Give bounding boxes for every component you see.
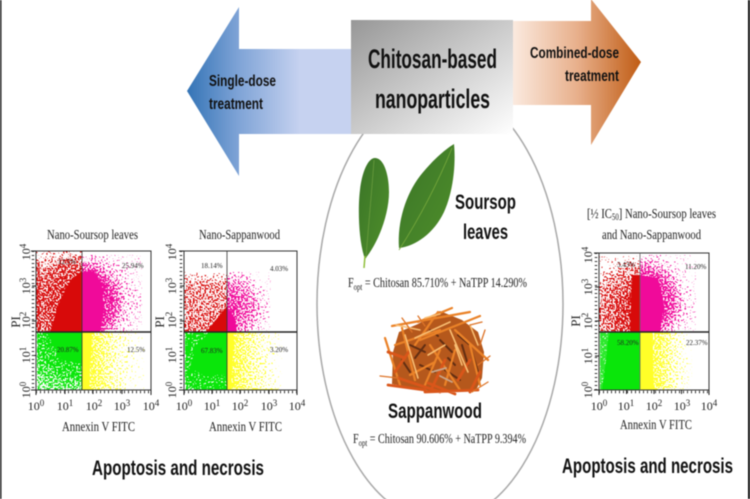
chart: nano-soursop leaves flow cytometry: 20.87%	[57, 346, 79, 354]
label: soursop leaves	[455, 191, 516, 244]
title: nano-sappanwood plot: Nano-Sappanwood	[199, 228, 280, 243]
icon: sappanwood chips	[380, 308, 490, 394]
axis ticks labels: plot 2: 0	[188, 398, 193, 408]
axis ticks labels: plot 2: 2	[164, 312, 174, 316]
axis ticks labels: plot 1: 1	[18, 347, 28, 351]
axis ticks labels: plot 1: 10	[19, 316, 33, 328]
chart: combined-dose flow cytometry: 11.20%	[685, 263, 706, 271]
axis ticks labels: plot 1: 10	[28, 399, 40, 413]
label: combined-dose treatment	[530, 45, 619, 85]
chart: nano-soursop leaves flow cytometry	[31, 251, 151, 395]
title: combined-dose plot: ] Nano-Soursop leaves	[619, 207, 716, 222]
axis ticks labels: plot 3: 1	[580, 348, 590, 352]
axis ticks labels: plot 3: 2	[580, 313, 590, 317]
axis ticks labels: plot 1: 10	[19, 386, 33, 398]
axis ticks labels: plot 1: 3	[126, 398, 131, 408]
axis ticks labels: plot 3: 10	[581, 251, 595, 263]
axis ticks labels: plot 3: 3	[686, 398, 691, 408]
axis ticks labels: plot 3: 4	[713, 398, 718, 408]
heading: chitosan-based nanoparticles: nanoparticles	[375, 84, 490, 114]
axis ticks labels: plot 2: 10	[289, 399, 301, 413]
axis ticks labels: plot 3: 10	[581, 317, 595, 329]
chart: nano-sappanwood flow cytometry	[179, 251, 297, 395]
axis ticks labels: plot 2: 10	[165, 282, 179, 294]
caption: apoptosis and necrosis left: Apoptosis and necrosis	[92, 457, 264, 480]
axis ticks labels: plot 3: 2	[658, 398, 662, 408]
axis label: PI plot 3: PI	[568, 315, 583, 327]
arrow: combined-dose treatment	[512, 0, 641, 145]
axis ticks labels: plot 2: 1	[216, 398, 220, 408]
axis ticks labels: plot 1: 10	[57, 399, 69, 413]
chart: nano-sappanwood flow cytometry: 4.03%	[270, 265, 288, 273]
axis ticks labels: plot 2: 4	[164, 243, 174, 248]
chart: combined-dose flow cytometry	[594, 253, 709, 395]
edge line: left	[0, 0, 2, 499]
axis ticks labels: plot 3: 10	[674, 399, 686, 413]
edge line: right	[748, 0, 750, 499]
axis ticks labels: plot 2: 10	[204, 399, 216, 413]
axis ticks labels: plot 1: 1	[69, 398, 73, 408]
axis label: PI plot 2: PI	[152, 316, 167, 328]
axis ticks labels: plot 2: 10	[176, 399, 188, 413]
title: combined-dose plot	[587, 207, 716, 243]
label: combined-dose treatment: Combined-dose	[530, 45, 619, 62]
axis label: Annexin V FITC plot 3: Annexin V FITC	[620, 418, 692, 433]
axis ticks labels: plot 3: 1	[630, 398, 634, 408]
chart: nano-sappanwood flow cytometry: 67.83%	[201, 347, 223, 355]
axis ticks labels: plot 2: 10	[232, 399, 244, 413]
axis ticks labels: plot 3: 10	[701, 399, 713, 413]
title: nano-soursop leaves plot: Nano-Soursop leaves	[47, 228, 138, 243]
axis ticks labels: plot 1: 10	[114, 399, 126, 413]
chart: combined-dose flow cytometry: 58.20%	[617, 339, 639, 347]
axis ticks labels: plot 1: 2	[98, 398, 102, 408]
formula: soursop leaves: F	[348, 275, 356, 290]
chart: nano-sappanwood flow cytometry: 3.20%	[270, 346, 288, 354]
axis ticks labels: plot 1: 10	[19, 248, 33, 260]
axis ticks labels: plot 2: 4	[301, 398, 306, 408]
chart: combined-dose flow cytometry: 22.37%	[686, 339, 708, 347]
label: single-dose treatment	[209, 73, 276, 113]
axis ticks labels: plot 1: 3	[18, 277, 28, 282]
label: soursop leaves: Soursop	[455, 191, 516, 214]
axis ticks labels: plot 1: 10	[86, 399, 98, 413]
axis ticks labels: plot 1: 0	[40, 398, 45, 408]
axis ticks labels: plot 2: 10	[261, 399, 273, 413]
axis ticks labels: plot 3: 10	[646, 399, 658, 413]
label: single-dose treatment: treatment	[209, 96, 263, 113]
axis ticks labels: plot 2: 2	[244, 398, 248, 408]
axis ticks labels: plot 1: 2	[18, 312, 28, 316]
formula: soursop leaves: = Chitosan 85.710% + NaTPP 14.290%	[362, 275, 527, 290]
formula: soursop leaves: opt	[354, 282, 363, 292]
axis ticks labels: plot 1: 10	[19, 351, 33, 363]
axis ticks labels: plot 3: 4	[580, 246, 590, 251]
axis ticks labels: plot 2: 10	[165, 386, 179, 398]
title: combined-dose plot: and Nano-Sappanwood	[602, 228, 701, 243]
label: soursop leaves: leaves	[463, 221, 508, 244]
axis ticks labels: plot 3: 10	[591, 399, 603, 413]
axis ticks labels: plot 3: 0	[603, 398, 608, 408]
axis ticks labels: plot 1: 4	[18, 243, 28, 248]
arrow: single-dose treatment	[187, 7, 352, 176]
axis ticks labels: plot 2: 0	[164, 381, 174, 386]
axis ticks labels: plot 2: 10	[165, 351, 179, 363]
title: combined-dose plot: [½ IC	[587, 207, 620, 222]
ellipse outline around plant materials	[317, 86, 563, 499]
axis ticks labels: plot 2: 3	[273, 398, 278, 408]
chart: nano-soursop leaves flow cytometry: 25.94%	[122, 262, 144, 270]
title: combined-dose plot: 50	[612, 212, 619, 222]
axis ticks labels: plot 1	[18, 243, 160, 413]
axis ticks labels: plot 3: 10	[581, 352, 595, 364]
axis ticks labels: plot 3: 10	[581, 386, 595, 398]
label: combined-dose treatment: treatment	[565, 68, 619, 85]
axis ticks labels: plot 2: 10	[165, 316, 179, 328]
axis ticks labels: plot 1: 10	[143, 399, 155, 413]
axis ticks labels: plot 3	[580, 246, 718, 413]
chart: nano-soursop leaves flow cytometry: 12.5%	[58, 258, 76, 266]
axis ticks labels: plot 2: 3	[164, 277, 174, 282]
chart: combined-dose flow cytometry: 3.43%	[617, 261, 635, 269]
axis ticks labels: plot 3: 10	[581, 283, 595, 295]
axis ticks labels: plot 1: 0	[18, 381, 28, 386]
label: single-dose treatment: Single-dose	[209, 73, 276, 90]
axis label: Annexin V FITC plot 2: Annexin V FITC	[209, 420, 282, 435]
axis ticks labels: plot 1: 10	[19, 282, 33, 294]
heading: chitosan-based nanoparticles	[368, 44, 497, 114]
axis ticks labels: plot 2: 10	[165, 248, 179, 260]
axis ticks labels: plot 3: 3	[580, 278, 590, 283]
chart: nano-sappanwood flow cytometry: 18.14%	[201, 262, 223, 270]
axis ticks labels: plot 2	[164, 243, 306, 413]
formula: sappanwood: opt	[359, 438, 368, 448]
label: sappanwood: Sappanwood	[388, 400, 482, 423]
heading: chitosan-based nanoparticles: Chitosan-based	[368, 44, 497, 74]
chart: nano-soursop leaves flow cytometry: 12.5%	[127, 346, 145, 354]
axis ticks labels: plot 2: 1	[164, 347, 174, 351]
formula: sappanwood: = Chitosan 90.606% + NaTPP 9.394%	[367, 431, 526, 446]
axis label: PI plot 1: PI	[8, 316, 23, 328]
axis ticks labels: plot 3: 0	[580, 381, 590, 386]
axis ticks labels: plot 1: 4	[155, 398, 160, 408]
axis ticks labels: plot 3: 10	[618, 399, 630, 413]
formula: sappanwood: F	[353, 431, 361, 446]
box: chitosan-based nanoparticles	[351, 20, 513, 134]
axis label: Annexin V FITC plot 1: Annexin V FITC	[62, 420, 135, 435]
icon: soursop leaves	[359, 144, 455, 268]
